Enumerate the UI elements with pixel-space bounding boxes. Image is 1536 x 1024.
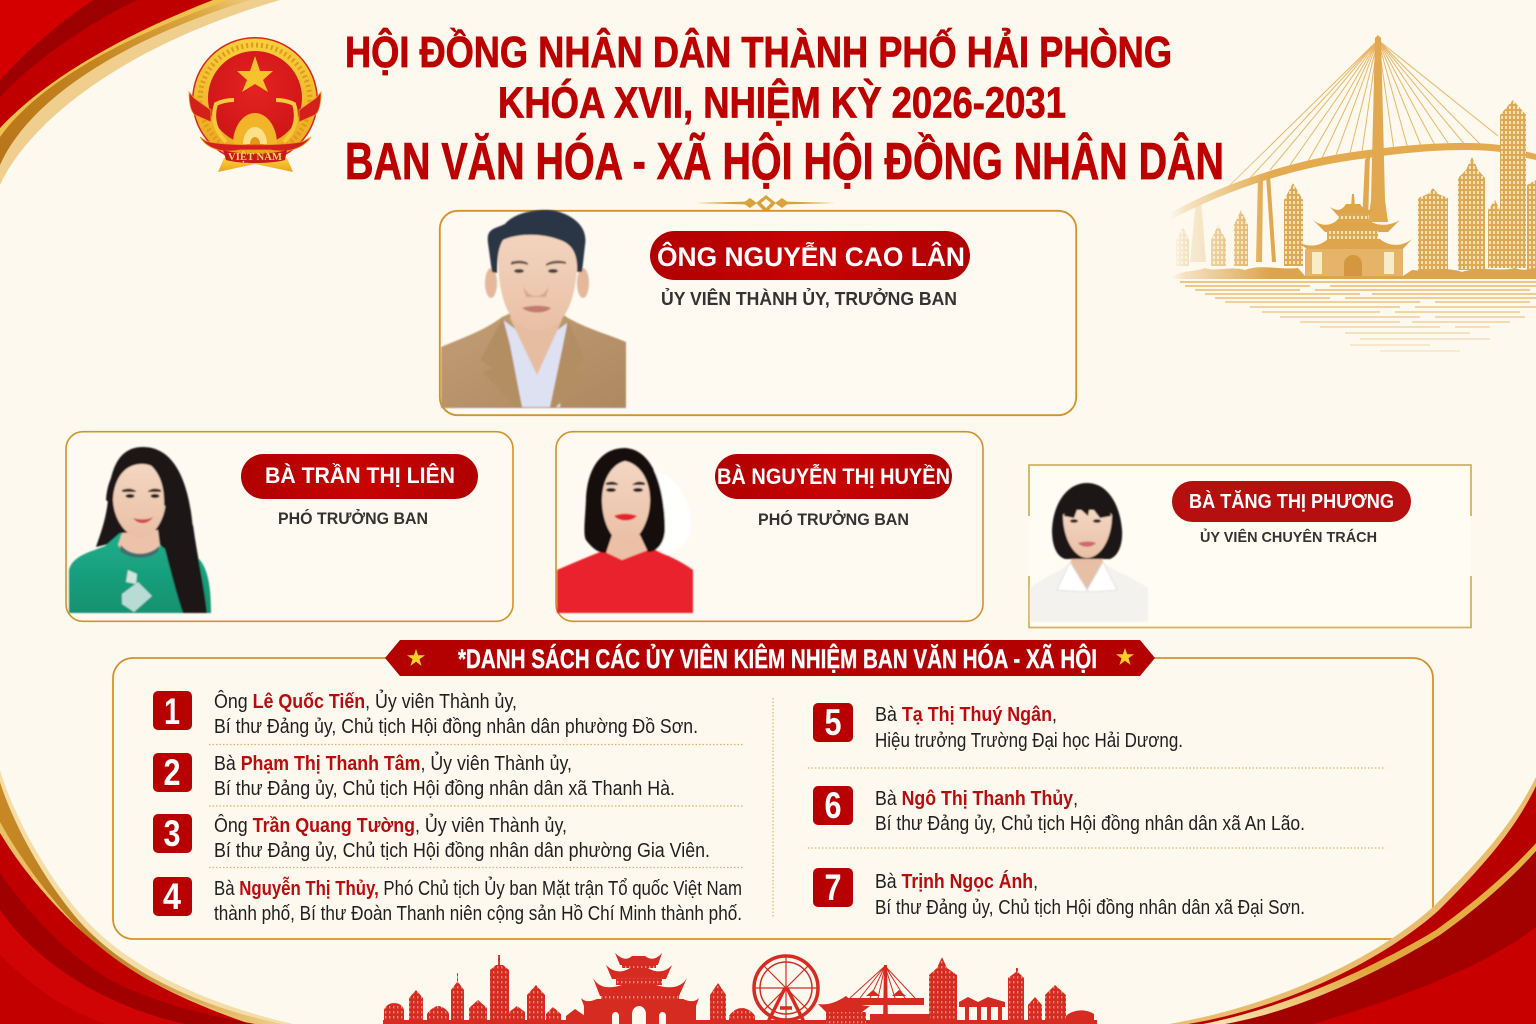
photo: Nguyễn Cao Lân bbox=[441, 210, 626, 408]
name pill bbox=[715, 454, 952, 499]
emblem ribbons bbox=[189, 92, 321, 151]
number badge 6: 6 bbox=[824, 785, 842, 826]
number badge 2 bbox=[153, 752, 192, 793]
member 2: Bà Phạm Thị Thanh Tâm, Ủy viên Thành ủy, bbox=[214, 751, 572, 775]
member 7 bbox=[875, 870, 1305, 919]
member 2: Bí thư Đảng ủy, Chủ tịch Hội đồng nhân dân xã Thanh Hà. bbox=[214, 778, 675, 800]
name pill: BÀ TĂNG THỊ PHƯƠNG bbox=[1189, 490, 1394, 513]
card: vice chair Nguyễn Thị Huyền bbox=[556, 432, 983, 621]
name pill: BÀ TRẦN THỊ LIÊN bbox=[265, 463, 455, 488]
small pavilion bbox=[959, 997, 1005, 1024]
member 3: Ông Trần Quang Tường, Ủy viên Thành ủy, bbox=[214, 813, 567, 837]
title bbox=[345, 26, 1224, 191]
member 6: Bí thư Đảng ủy, Chủ tịch Hội đồng nhân dân xã An Lão. bbox=[875, 813, 1305, 835]
card: chairman bbox=[440, 210, 1076, 415]
number badge 5: 5 bbox=[824, 702, 842, 743]
name pill: BÀ NGUYỄN THỊ HUYỀN bbox=[717, 463, 950, 489]
ornament under title bbox=[695, 195, 835, 213]
title: HỘI ĐỒNG NHÂN DÂN THÀNH PHỐ HẢI PHÒNG bbox=[345, 26, 1172, 77]
bridge deck bbox=[1170, 143, 1536, 220]
banner: list heading bbox=[385, 640, 1155, 676]
number badge 3: 3 bbox=[164, 813, 180, 854]
emblem base bbox=[218, 158, 293, 172]
gold city and bridge illustration bbox=[1170, 35, 1536, 279]
member 7: Bí thư Đảng ủy, Chủ tịch Hội đồng nhân dân xã Đại Sơn. bbox=[875, 897, 1305, 919]
skyline buildings bbox=[384, 955, 1066, 1024]
swoosh: top left corner bbox=[0, 0, 280, 185]
member 5: Bà Tạ Thị Thuý Ngân, bbox=[875, 704, 1057, 726]
banner star left bbox=[407, 649, 425, 666]
name pill bbox=[1172, 481, 1411, 522]
title: BAN VĂN HÓA - XÃ HỘI HỘI ĐỒNG NHÂN DÂN bbox=[345, 132, 1224, 191]
member 3: Bí thư Đảng ủy, Chủ tịch Hội đồng nhân dân phường Gia Viên. bbox=[214, 840, 710, 862]
gold tree line bbox=[1170, 267, 1536, 279]
member 7: Bà Trịnh Ngọc Ánh, bbox=[875, 870, 1038, 893]
role: ỦY VIÊN THÀNH ỦY, TRƯỞNG BAN bbox=[661, 288, 957, 309]
emblem rice branches bbox=[214, 100, 296, 142]
emblem ring laurel bbox=[200, 45, 310, 155]
gold pagoda bbox=[1298, 194, 1413, 276]
number badge 6 bbox=[813, 785, 853, 826]
member 5: Hiệu trưởng Trường Đại học Hải Dương. bbox=[875, 730, 1183, 752]
swoosh: bottom left corner bbox=[0, 770, 293, 1024]
national emblem bbox=[189, 37, 321, 172]
number badge 4 bbox=[153, 876, 192, 917]
gold buildings bbox=[1176, 100, 1536, 272]
swoosh: bottom right corner bbox=[1169, 777, 1536, 1024]
red city skyline bbox=[383, 953, 1097, 1024]
number badge 1 bbox=[153, 691, 192, 732]
photo: Nguyễn Thị Huyền bbox=[557, 448, 693, 613]
member 1: Ông Lê Quốc Tiến, Ủy viên Thành ủy, bbox=[214, 689, 517, 713]
ferris wheel bbox=[754, 956, 818, 1024]
member 2 bbox=[214, 751, 675, 800]
title: KHÓA XVII, NHIỆM KỲ 2026-2031 bbox=[498, 78, 1066, 128]
bridge towers bbox=[1190, 35, 1388, 262]
member 4: Bà Nguyễn Thị Thủy, Phó Chủ tịch Ủy ban Mặt trận Tổ quốc Việt Nam bbox=[214, 876, 742, 900]
banner text: *DANH SÁCH CÁC ỦY VIÊN KIÊM NHIỆM BAN VĂN HÓA - XÃ HỘI bbox=[458, 642, 1097, 674]
name pill bbox=[650, 231, 970, 280]
number badge 7 bbox=[813, 867, 853, 908]
number badge 7: 7 bbox=[824, 867, 842, 908]
number badge 3 bbox=[153, 813, 192, 854]
pavilion and bridge bbox=[818, 965, 930, 1024]
member 3 bbox=[214, 813, 710, 862]
number badge 2: 2 bbox=[164, 752, 180, 793]
gold water reflection bbox=[1180, 282, 1536, 351]
photo: Tăng Thị Phương bbox=[1030, 483, 1148, 622]
number badge 5 bbox=[813, 702, 853, 743]
member 1 bbox=[214, 689, 698, 738]
card: vice chair Trần Thị Liên bbox=[66, 432, 513, 621]
role: PHÓ TRƯỞNG BAN bbox=[278, 509, 428, 528]
panel: list of committee members bbox=[113, 658, 1433, 939]
member 4 bbox=[214, 876, 742, 925]
emblem star bbox=[237, 56, 273, 92]
emblem gear bbox=[233, 113, 277, 144]
name pill bbox=[241, 454, 478, 499]
skyline ground bbox=[383, 1020, 1097, 1024]
pagoda bbox=[581, 953, 699, 1024]
role: PHÓ TRƯỞNG BAN bbox=[758, 510, 909, 529]
member 6: Bà Ngô Thị Thanh Thủy, bbox=[875, 788, 1078, 810]
photo: Trần Thị Liên bbox=[69, 447, 211, 613]
banner star right bbox=[1116, 648, 1134, 665]
number badge 4: 4 bbox=[163, 876, 181, 917]
name pill: ÔNG NGUYỄN CAO LÂN bbox=[657, 241, 965, 272]
role: ỦY VIÊN CHUYÊN TRÁCH bbox=[1200, 528, 1377, 546]
member 4: thành phố, Bí thư Đoàn Thanh niên cộng sản Hồ Chí Minh thành phố. bbox=[214, 903, 742, 925]
emblem banner: VIỆT NAM bbox=[228, 150, 283, 163]
member 5 bbox=[875, 704, 1183, 752]
number badge 1: 1 bbox=[164, 691, 180, 732]
member 6 bbox=[875, 788, 1305, 835]
member 1: Bí thư Đảng ủy, Chủ tịch Hội đồng nhân dân phường Đồ Sơn. bbox=[214, 716, 698, 738]
bridge cables bbox=[1225, 40, 1498, 190]
card: member Tăng Thị Phương bbox=[1029, 464, 1471, 628]
